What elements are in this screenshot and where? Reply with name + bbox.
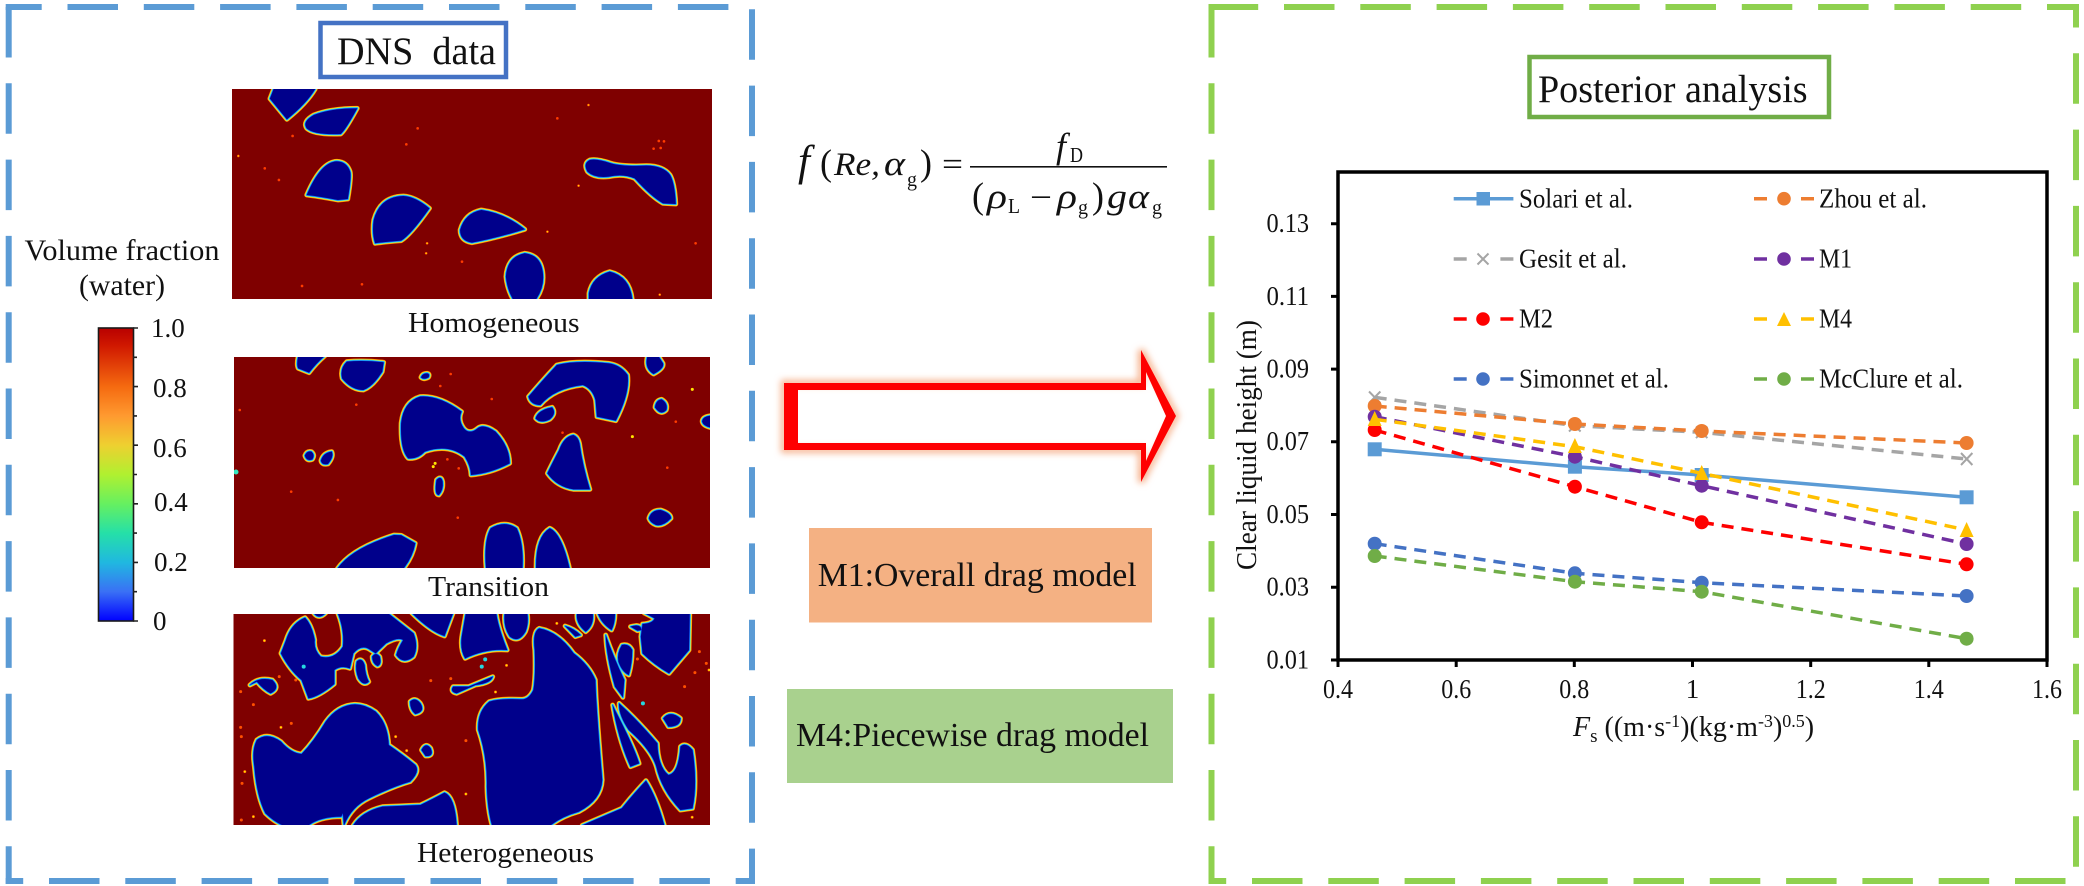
caption: Homogeneous: Homogeneous [408,307,580,339]
x axis tick labels: 1 [1686,674,1699,704]
formula: drag function: ρ [986,177,1007,216]
x axis title: F [1572,712,1591,743]
y axis tick labels: 0.03 [1266,572,1309,602]
y axis tick labels: 0.13 [1266,208,1309,238]
formula: drag function [798,126,1167,219]
label: volume fraction (water) [24,234,220,302]
colour bar legend: 0.8 [153,373,187,403]
box: M1 overall drag model: M1:Overall drag model [818,557,1137,594]
series: Solari et al. [1368,442,1974,504]
x axis tick labels: 1.4 [1914,674,1944,704]
x axis title: ) [1773,712,1782,743]
formula: drag function: ) [920,143,932,184]
formula: drag function: − [1030,180,1052,216]
y axis tick labels: 0.11 [1266,281,1309,311]
formula: drag function: Re, [833,147,880,183]
series: M2 [1368,423,1974,571]
box: M1 overall drag model [809,528,1152,622]
formula: drag function: ( [820,143,832,184]
heading: DNS data: DNS data [337,30,496,73]
colour bar legend: 0.6 [153,433,187,463]
y axis tick labels [1266,208,1309,674]
x axis tick labels: 0.6 [1441,674,1471,704]
formula: drag function: ) [1092,176,1104,217]
field: transition volume fraction [234,356,711,569]
panel: DNS data frame [6,4,755,884]
x axis title: -1 [1665,711,1680,731]
chart legend: M4 [1819,304,1852,334]
chart legend: M1 [1819,244,1852,274]
colour bar legend [98,313,188,636]
colour bar legend: 0 [153,606,166,636]
chart legend [1454,184,1963,394]
chart legend: McClure et al. [1819,364,1963,394]
formula: drag function: g [1152,197,1162,219]
formula: drag function: = [942,147,963,183]
series: Simonnet et al. [1368,537,1974,603]
x axis tick labels: 1.2 [1796,674,1826,704]
y axis tick labels: 0.01 [1266,644,1309,674]
y axis tick labels: 0.05 [1266,499,1309,529]
series: Zhou et al. [1368,399,1974,450]
chart legend: Simonnet et al. [1519,364,1669,394]
label: volume fraction (water): Volume fraction [24,234,220,267]
box: M4 piecewise drag model: M4:Piecewise drag model [796,717,1149,754]
chart legend: Solari et al. [1519,184,1633,214]
x axis title: )(kg·m [1680,712,1758,743]
x axis title: s [1590,726,1598,747]
heading: Posterior analysis: Posterior analysis [1538,68,1808,111]
formula: drag function: α [1128,177,1150,216]
formula: drag function: ρ [1056,177,1077,216]
series: M1 [1368,410,1974,551]
formula: drag function: g [1107,177,1127,216]
formula: drag function: f [1056,126,1071,166]
chart legend: Zhou et al. [1819,184,1927,214]
colour bar legend: 0.2 [154,547,188,577]
formula: drag function: D [1070,143,1083,167]
y axis tick labels: 0.07 [1266,426,1309,456]
formula: drag function: g [1078,197,1088,219]
y axis title: Clear liquid height (m) [1231,320,1263,570]
formula: drag function: f [798,138,815,185]
formula: drag function: L [1008,194,1020,218]
plot frame and ticks [1331,172,2047,667]
x axis tick labels: 1.6 [2032,674,2062,704]
heading: DNS data [320,23,506,77]
series: Gesit et al. [1369,392,1972,465]
colour bar legend: 0.4 [154,487,188,517]
field: heterogeneous volume fraction [234,613,710,825]
formula: drag function: ( [972,176,984,217]
field: homogeneous volume fraction [232,89,712,300]
formula: drag function: α [884,144,906,183]
line chart: clear liquid height vs Fs [1231,172,2062,747]
panel: Posterior analysis frame [1208,4,2079,884]
x axis tick labels: 0.4 [1323,674,1353,704]
formula: drag function: g [907,169,917,191]
box: M4 piecewise drag model [787,689,1173,783]
x axis tick labels: 0.8 [1559,674,1589,704]
chart legend: M2 [1519,304,1553,334]
label: volume fraction (water): (water) [79,269,165,302]
x axis title: 0.5 [1782,711,1805,731]
x axis title: -3 [1758,711,1773,731]
arrow: DNS data to posterior analysis [784,350,1176,482]
y axis tick labels: 0.09 [1266,354,1309,384]
caption: Transition: Transition [428,571,550,603]
x axis title: ) [1805,712,1814,743]
caption: Heterogeneous: Heterogeneous [417,837,594,869]
x axis title: ((m·s [1598,712,1665,743]
series: M4 [1368,411,1974,537]
x axis tick labels [1323,674,2062,704]
chart legend: Gesit et al. [1519,244,1627,274]
heading: Posterior analysis [1530,57,1829,117]
colour bar legend: 1.0 [151,313,185,343]
series: McClure et al. [1368,549,1974,646]
